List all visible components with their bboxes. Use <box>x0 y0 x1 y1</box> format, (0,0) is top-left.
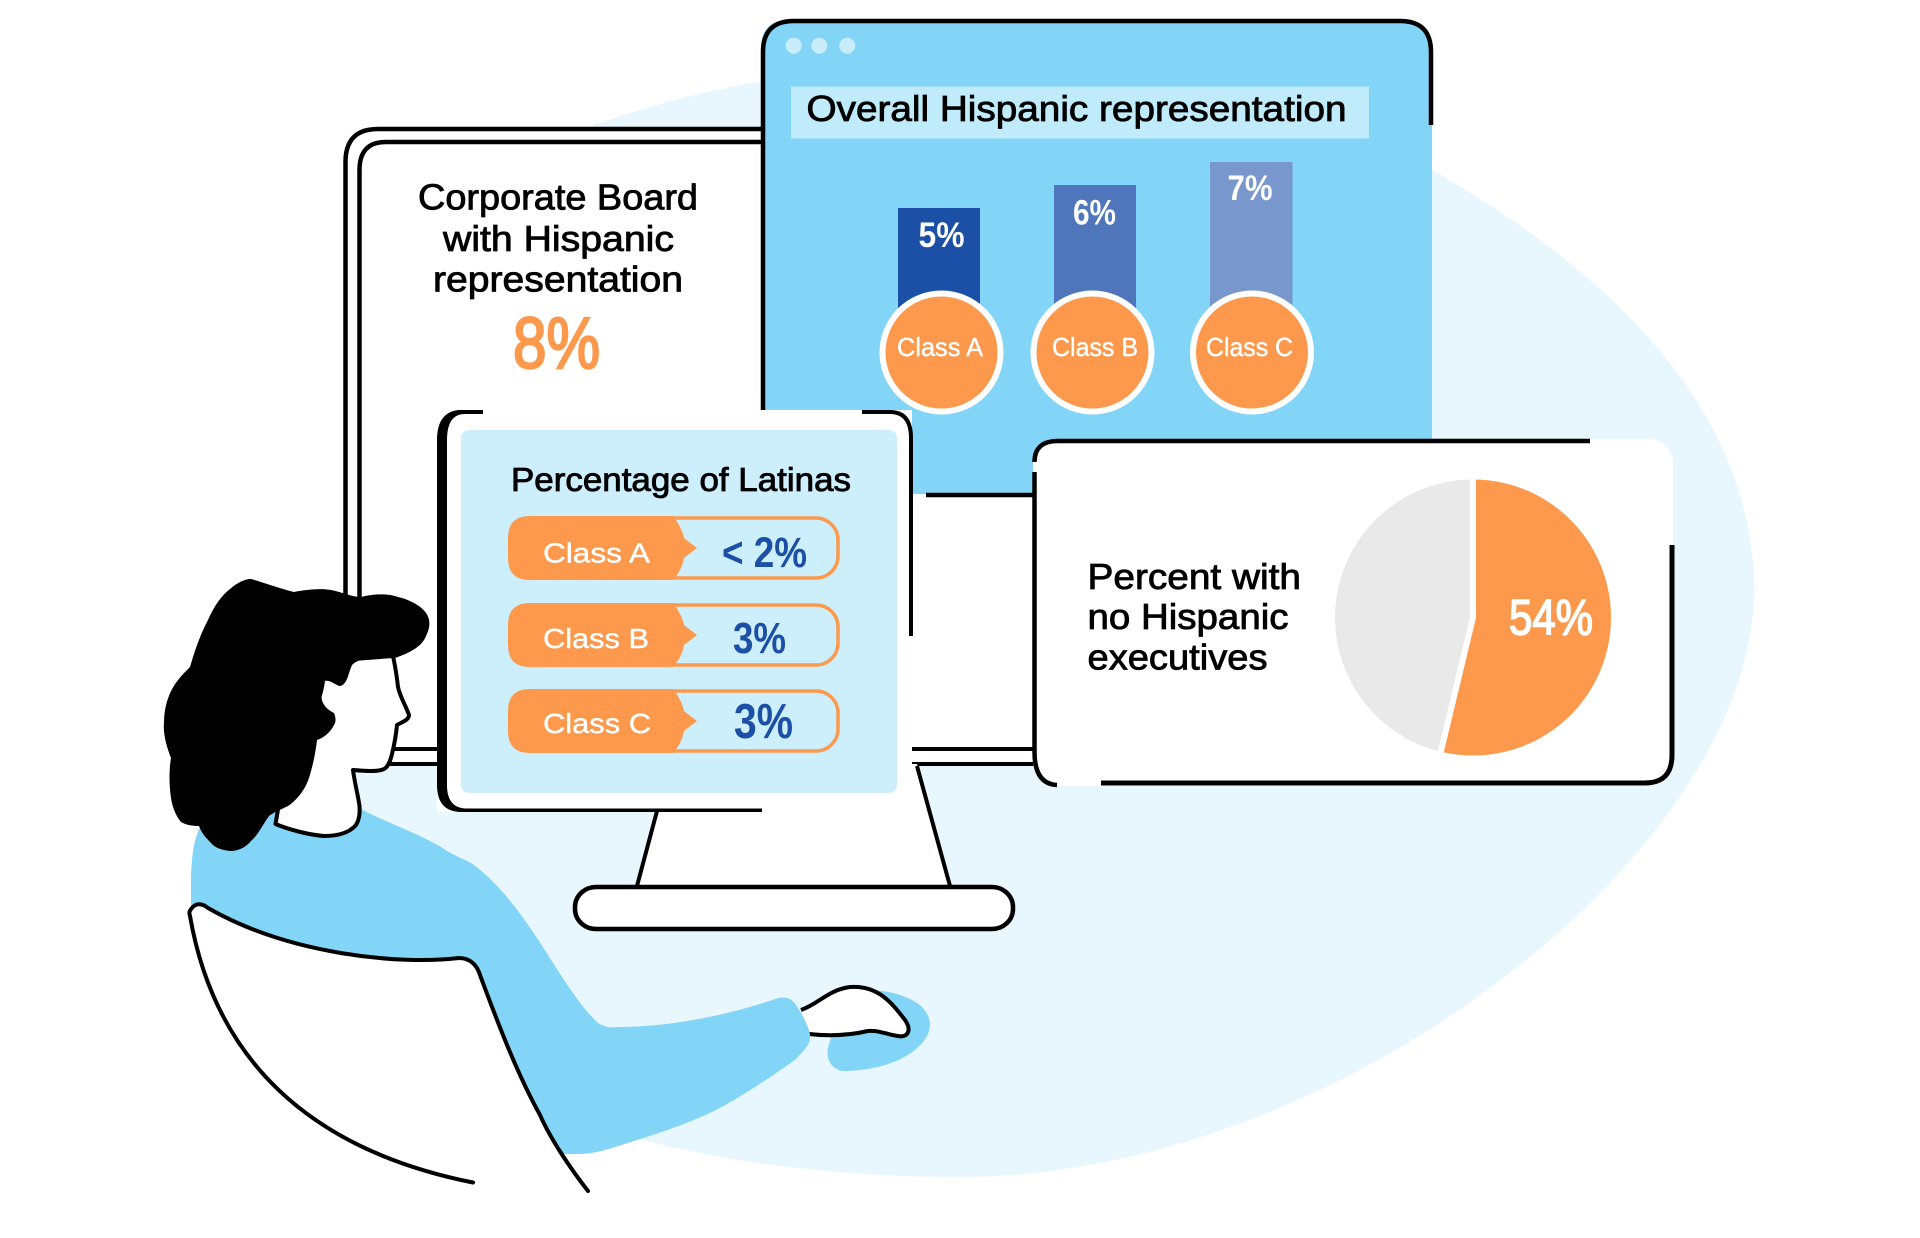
background blob <box>350 64 1754 1177</box>
text: percent with no Hispanic executives: executives <box>1088 636 1268 678</box>
pill: class B: Class B <box>543 623 649 654</box>
hair <box>164 579 429 851</box>
pill: class A: Class A <box>543 538 650 568</box>
monitor back frame <box>345 127 1040 765</box>
pill: class B <box>508 603 838 667</box>
bar: class C <box>1210 162 1292 312</box>
window dots <box>786 38 855 54</box>
person at desk <box>164 579 930 1191</box>
heading bar <box>791 86 1369 138</box>
pill: class C: Class C <box>543 708 651 739</box>
monitor stand <box>637 764 950 886</box>
pill: class C <box>508 689 838 753</box>
circle: class C <box>1193 294 1311 412</box>
inner panel <box>461 430 897 793</box>
bar: class B <box>1054 185 1136 315</box>
bar: class C: 7% <box>1228 169 1272 208</box>
text: corporate board with Hispanic representation <box>418 176 698 300</box>
pill: class A: < 2% <box>722 529 807 577</box>
mouse pad <box>828 990 930 1071</box>
pill: class C: 3% <box>734 695 793 749</box>
panel: percent with no Hispanic executives <box>1033 439 1673 786</box>
circle: class B <box>1034 294 1152 412</box>
text: percent with no Hispanic executives: Percent with <box>1088 556 1301 597</box>
stat: 8%: 8% <box>513 304 600 384</box>
neck and face <box>276 656 409 836</box>
circle: class A: Class A <box>897 332 984 362</box>
panel: percentage of Latinas tablet <box>437 410 912 812</box>
bar: class A: 5% <box>918 216 964 255</box>
heading: percentage of Latinas: Percentage of Latinas <box>511 461 851 498</box>
text: corporate board with Hispanic representation: representation <box>433 258 683 300</box>
panel: overall Hispanic representation browser window <box>761 20 1432 495</box>
pie chart: 54% <box>1335 477 1611 756</box>
text: corporate board with Hispanic representation: Corporate Board <box>418 176 698 218</box>
circle: class C: Class C <box>1206 332 1293 362</box>
chair <box>189 904 588 1191</box>
monitor base <box>575 887 1013 929</box>
bar: class A <box>898 208 980 318</box>
pie chart: 54%: 54% <box>1509 590 1593 646</box>
hand <box>801 987 909 1036</box>
pill: class A <box>508 516 838 580</box>
sweater <box>191 800 810 1154</box>
text: percent with no Hispanic executives: no Hispanic <box>1088 596 1288 637</box>
circle: class A <box>882 294 1000 412</box>
heading: overall Hispanic representation: Overall Hispanic representation <box>806 88 1346 129</box>
circle: class B: Class B <box>1052 332 1138 362</box>
text: corporate board with Hispanic representation: with Hispanic <box>442 218 674 259</box>
pill: class B: 3% <box>733 614 786 663</box>
bar: class B: 6% <box>1073 194 1116 232</box>
text: percent with no Hispanic executives <box>1088 556 1301 678</box>
